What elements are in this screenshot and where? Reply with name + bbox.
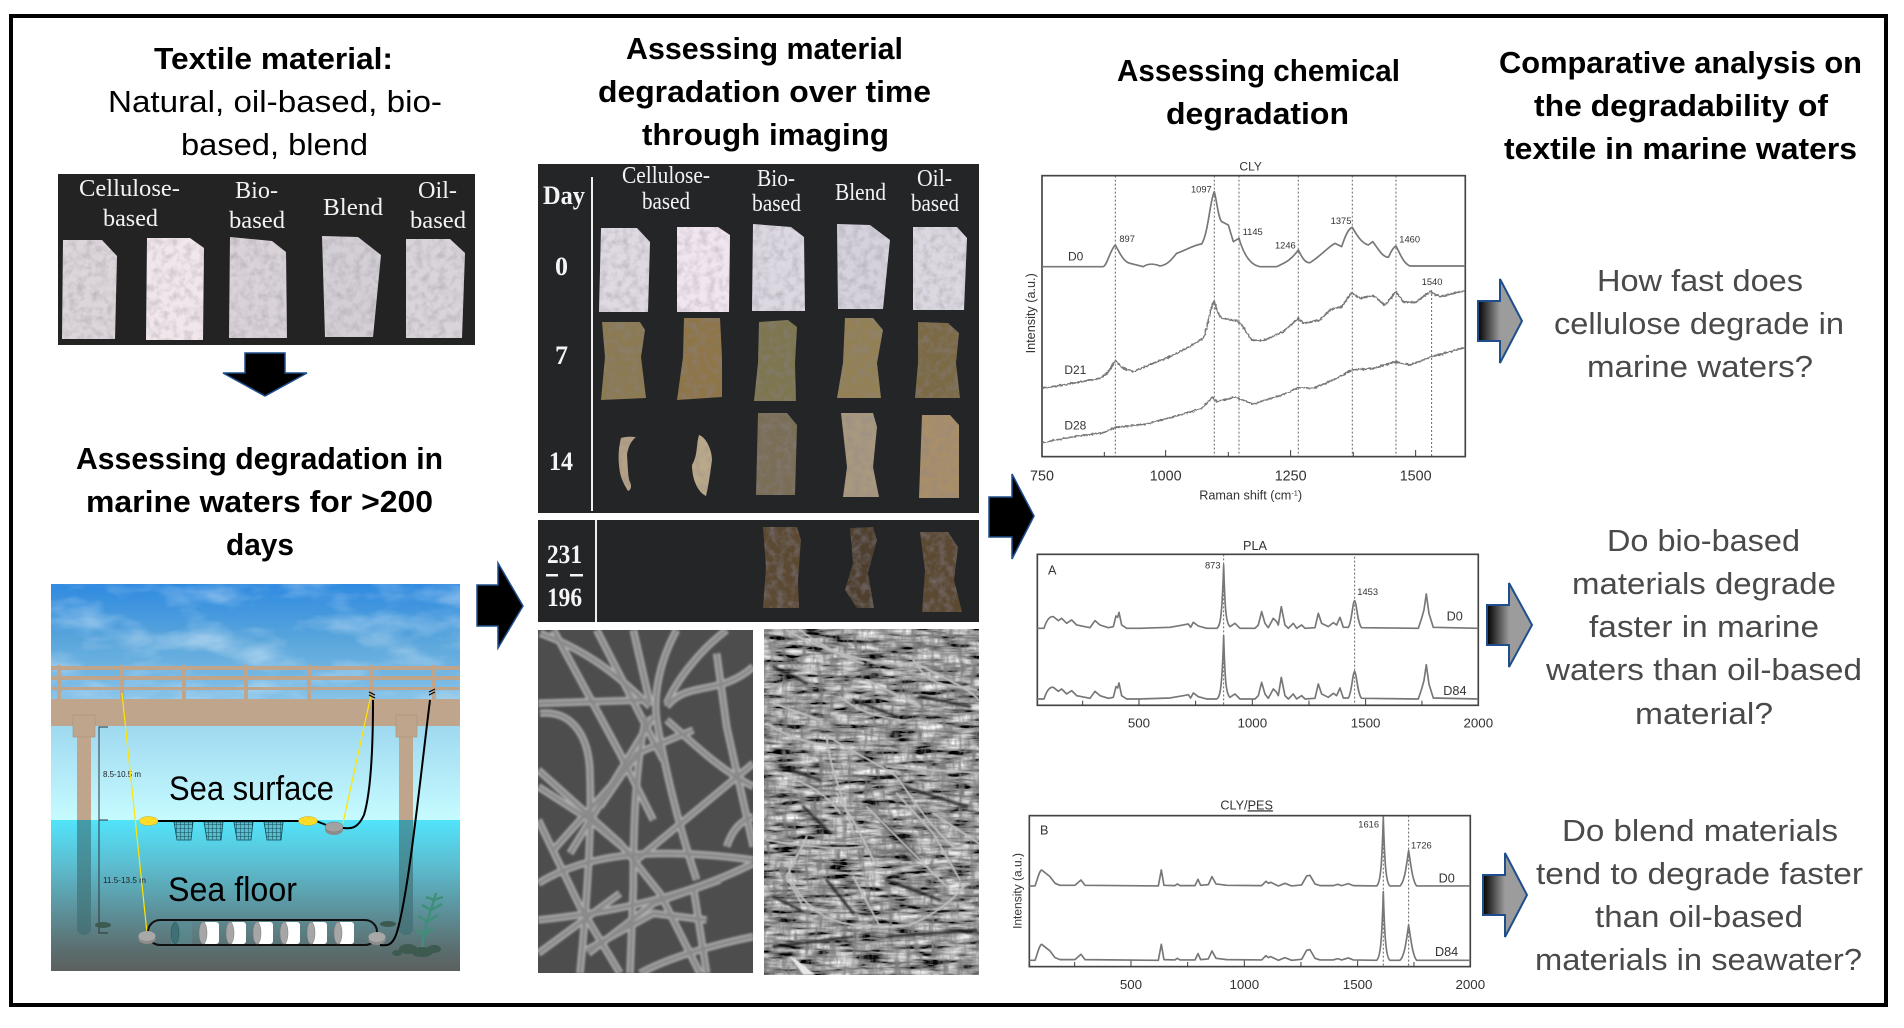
pier deck — [51, 699, 460, 726]
question: bio-based — [1545, 523, 1862, 731]
curve D21 — [1042, 291, 1465, 388]
question: bio-based: materials degrade — [1572, 566, 1836, 601]
peak labels: 1726 — [1411, 840, 1432, 850]
peak labels — [1119, 185, 1442, 287]
heading: comparative analysis: Comparative analysis on — [1499, 45, 1862, 80]
heading: assessing chemical degradation — [1117, 53, 1400, 131]
day 7 samples — [601, 318, 960, 401]
heading: assessing degradation in marine waters: marine waters for >200 — [86, 484, 433, 519]
question: blend — [1535, 813, 1863, 977]
chart: CLY/PES Raman spectrum: CLY/PES — [1220, 798, 1273, 812]
chart: CLY/PES Raman spectrum — [1010, 798, 1485, 992]
heading: assessing material degradation: degradation over time — [598, 74, 931, 109]
question: cellulose — [1554, 263, 1844, 384]
trace labels: D0 — [1439, 871, 1455, 885]
axis tick labels — [1030, 469, 1432, 485]
heading: textile material: Textile material: — [154, 41, 393, 76]
axis tick labels: 500 — [1120, 977, 1142, 992]
peak labels: 1097 — [1191, 185, 1212, 195]
day fraction labels: 196 — [547, 583, 582, 612]
baskets — [174, 822, 283, 840]
axis tick labels — [1128, 716, 1493, 731]
column labels: Oil- — [917, 166, 952, 192]
axis tick labels: 2000 — [1455, 977, 1485, 992]
question: blend: tend to degrade faster — [1536, 856, 1863, 891]
peak labels: 873 — [1205, 560, 1221, 570]
depth scale: 11.5-13.5 m — [103, 876, 146, 885]
column labels: based — [642, 189, 690, 215]
peak labels — [1358, 819, 1432, 850]
column labels: Cellulose- — [622, 163, 710, 189]
column labels: Blend — [835, 180, 886, 206]
heading: assessing chemical degradation: Assessing chemical — [1117, 53, 1400, 88]
day fraction labels: 231 — [547, 540, 582, 569]
day fraction labels — [546, 540, 583, 612]
question: blend: than oil-based — [1595, 899, 1803, 934]
x axis title: ) — [1298, 488, 1302, 502]
SEM image: degraded fibres — [764, 629, 979, 975]
question: bio-based: Do bio-based — [1607, 523, 1800, 558]
pier pillars — [73, 715, 417, 935]
diagram: pier deployment in the sea — [51, 584, 460, 971]
seafloor rig — [138, 689, 435, 945]
trace labels: D84 — [1443, 684, 1467, 698]
day 0 samples — [599, 224, 967, 312]
axis tick labels: 1500 — [1351, 716, 1380, 731]
curve labels: D21 — [1064, 363, 1087, 377]
curve D84 — [1029, 892, 1470, 960]
arrow: down to deployment — [223, 353, 307, 396]
axis tick labels: 1250 — [1275, 469, 1307, 485]
sample labels: based — [410, 208, 466, 234]
arrow: to question 3 — [1483, 853, 1527, 937]
peak labels: 1460 — [1399, 234, 1420, 244]
heading: assessing degradation in marine waters — [76, 441, 443, 562]
curve labels — [1064, 250, 1087, 432]
rocks — [95, 921, 441, 957]
x axis title: -1 — [1291, 488, 1298, 497]
axis tick labels: 1500 — [1343, 977, 1372, 992]
trace labels — [1443, 610, 1467, 698]
axis tick labels: 1000 — [1229, 977, 1259, 992]
peak labels: 897 — [1119, 234, 1135, 244]
question: cellulose: marine waters? — [1587, 349, 1813, 384]
axis tick labels: 2000 — [1463, 716, 1493, 731]
sample labels — [79, 176, 466, 234]
day labels — [543, 181, 585, 476]
axis tick labels — [1120, 977, 1485, 992]
heading: assessing material degradation: through imaging — [642, 117, 889, 152]
axis tick labels: 1500 — [1400, 469, 1432, 485]
curve labels: D28 — [1064, 418, 1087, 432]
axis tick labels: 500 — [1128, 716, 1150, 731]
question: blend: Do blend materials — [1562, 813, 1838, 848]
column labels — [622, 163, 959, 217]
curve D84 — [1037, 636, 1478, 699]
heading: textile material: based, blend — [181, 127, 368, 162]
trace labels: D84 — [1435, 945, 1458, 959]
degraded samples — [763, 527, 962, 612]
peak labels: 1540 — [1422, 277, 1442, 287]
question: bio-based: faster in marine — [1589, 609, 1819, 644]
panel: day 231/196 samples — [538, 520, 979, 622]
pier railing — [51, 665, 460, 711]
day labels: 14 — [549, 447, 573, 476]
heading: textile material — [108, 41, 442, 162]
arrow: to question 2 — [1487, 583, 1532, 667]
curve labels: D0 — [1068, 250, 1084, 264]
trace labels: D0 — [1447, 610, 1463, 624]
curve D0 — [1037, 565, 1478, 628]
heading: comparative analysis: the degradability of — [1534, 88, 1829, 123]
arrow: to question 1 — [1478, 279, 1522, 363]
sample labels: Bio- — [235, 178, 278, 204]
depth scale — [99, 727, 146, 933]
panel letter: A — [1048, 563, 1057, 577]
y axis title: Intensity (a.u.) — [1024, 273, 1038, 353]
axis tick labels: 750 — [1030, 469, 1054, 485]
panel: textile samples — [58, 174, 475, 345]
peak labels: 1616 — [1358, 819, 1379, 829]
arrow: to imaging — [477, 563, 523, 648]
peak labels: 1453 — [1357, 587, 1378, 597]
axis tick labels: 1000 — [1237, 716, 1267, 731]
question: bio-based: material? — [1635, 696, 1773, 731]
heading: comparative analysis: textile in marine waters — [1504, 131, 1857, 166]
curve D0 — [1029, 817, 1470, 886]
heading: textile material: Natural, oil-based, bio- — [108, 84, 442, 119]
heading: assessing chemical degradation: degradation — [1166, 96, 1349, 131]
question: cellulose: How fast does — [1597, 263, 1803, 298]
surface rig — [139, 692, 375, 840]
day labels: 0 — [555, 252, 568, 281]
arrow: to chemical analysis — [989, 474, 1034, 559]
sample labels: Blend — [323, 195, 383, 221]
sea floor label: Sea floor — [168, 871, 297, 909]
chart: PLA Raman spectrum: PLA — [1243, 539, 1267, 553]
chart: PLA Raman spectrum — [1037, 539, 1493, 731]
question: blend: materials in seawater? — [1535, 942, 1862, 977]
x axis title: Raman shift (cm — [1199, 488, 1291, 502]
heading: assessing material degradation — [598, 31, 931, 152]
peak labels: 1375 — [1331, 216, 1351, 226]
heading: assessing degradation in marine waters: days — [226, 527, 294, 562]
peak labels — [1205, 560, 1378, 597]
peak labels: 1246 — [1275, 241, 1296, 251]
column labels: based — [752, 191, 801, 217]
yellow ropes — [122, 693, 371, 933]
column labels: based — [911, 191, 959, 217]
SEM image: intact fibres — [538, 630, 753, 973]
seaweed — [416, 893, 443, 948]
axis tick labels: 1000 — [1150, 469, 1182, 485]
day labels: Day — [543, 181, 585, 210]
curve D0 — [1042, 192, 1465, 267]
panel: imaging over days — [538, 163, 979, 513]
y axis title: Intensity (a.u.) — [1010, 853, 1024, 929]
heading: comparative analysis — [1499, 45, 1862, 166]
peak labels: 1145 — [1243, 227, 1263, 237]
sample labels: based — [103, 206, 158, 232]
heading: assessing material degradation: Assessing material — [626, 31, 903, 66]
trace labels — [1435, 871, 1458, 959]
sample labels: based — [229, 208, 285, 234]
day labels: 7 — [555, 341, 568, 370]
sample labels: Cellulose- — [79, 176, 180, 202]
column labels: Bio- — [757, 166, 795, 192]
depth scale: 8.5-10.5 m — [103, 770, 141, 779]
question: bio-based: waters than oil-based — [1545, 652, 1862, 687]
sea surface label: Sea surface — [169, 770, 334, 808]
chart: CLY Raman spectrum: CLY — [1239, 160, 1262, 174]
heading: assessing degradation in marine waters: Assessing degradation in — [76, 441, 443, 476]
curve D28 — [1042, 347, 1465, 443]
sample swatches — [62, 236, 465, 340]
question: cellulose: cellulose degrade in — [1554, 306, 1844, 341]
sample labels: Oil- — [418, 178, 457, 204]
chart: CLY Raman spectrum — [1024, 160, 1465, 502]
panel letter: B — [1040, 823, 1048, 837]
day 14 samples — [619, 413, 959, 498]
